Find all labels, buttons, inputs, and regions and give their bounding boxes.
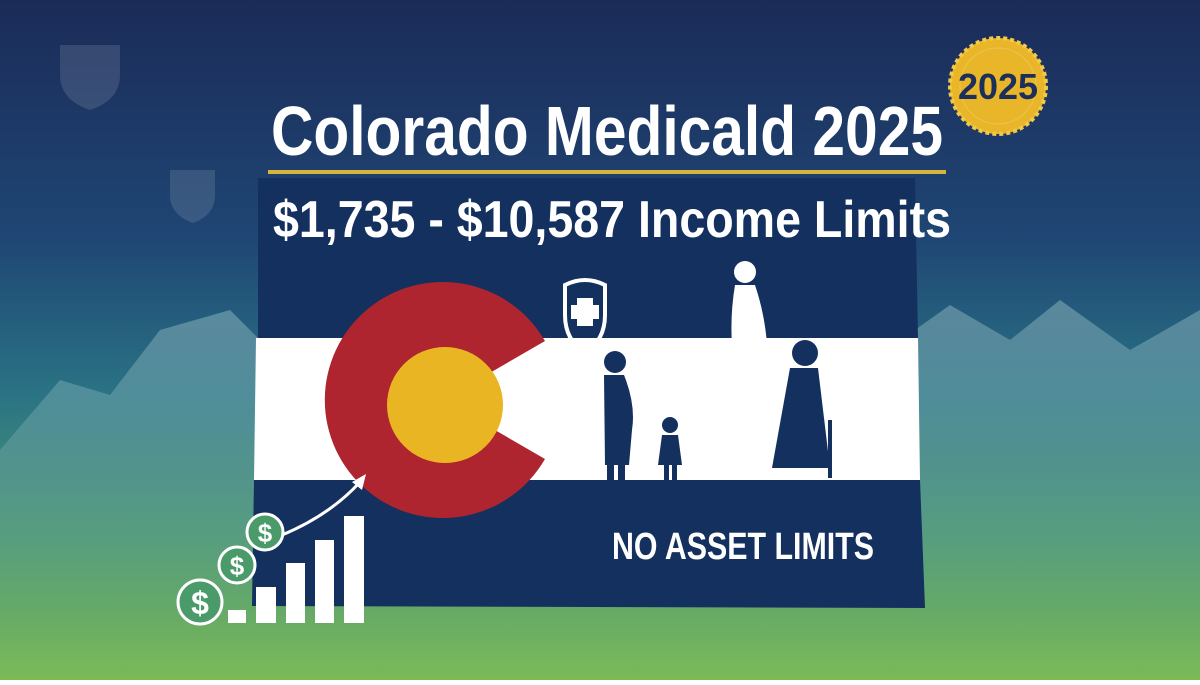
family silhouettes bbox=[604, 340, 832, 480]
bar chart with coins bbox=[178, 474, 366, 624]
badge 2025 bbox=[950, 38, 1046, 134]
flag panel bbox=[252, 178, 925, 608]
icon: medical shield bbox=[565, 280, 605, 353]
faint shield icons bbox=[60, 45, 215, 223]
bar chart with coins: $ bbox=[230, 551, 245, 581]
no asset limits: NO ASSET LIMITS bbox=[612, 526, 874, 568]
subtitle: $1,735 - $10,587 Income Limits bbox=[273, 191, 951, 249]
bar chart with coins: $ bbox=[191, 585, 209, 621]
badge 2025: 2025 bbox=[958, 66, 1038, 107]
bar chart with coins: $ bbox=[258, 518, 273, 548]
pregnant woman white bbox=[705, 261, 782, 403]
mountains right bbox=[915, 300, 1200, 620]
C emblem bbox=[325, 282, 545, 518]
title: Colorado Medicald 2025 bbox=[271, 92, 943, 170]
mountains left bbox=[0, 310, 260, 620]
